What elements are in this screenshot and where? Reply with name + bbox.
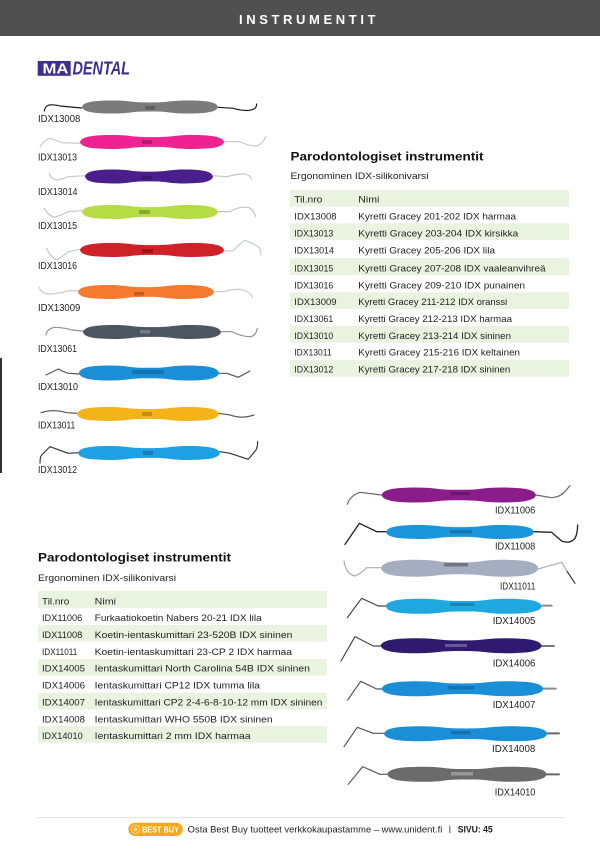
label: IDX13010: [38, 382, 79, 393]
instrument: IDX13010: [38, 365, 250, 393]
decorative edge strip: [0, 358, 2, 473]
instrument: IDX13014: [38, 169, 252, 198]
label: IDX14006: [493, 658, 536, 669]
label: IDX14005: [493, 616, 536, 627]
instrument: IDX13013: [38, 135, 266, 164]
table: Kyretti Gracey 201-202 IDX harmaa: [358, 211, 517, 221]
table: Kyretti Gracey 203-204 IDX kirsikka: [358, 228, 519, 238]
heading: Parodontologiset instrumentit: [38, 551, 231, 565]
label: IDX14008: [492, 744, 536, 755]
table: IDX13014: [294, 245, 334, 255]
table: IDX14008: [42, 714, 85, 724]
table: Ientaskumittari CP12 IDX tumma lila: [95, 681, 261, 691]
instrument: IDX14007: [348, 681, 556, 711]
instrument: IDX14008: [344, 726, 559, 755]
table: IDX13012: [294, 365, 333, 375]
panel: upper product table: [290, 150, 569, 377]
header bar: [0, 0, 600, 36]
table: IDX11006: [42, 613, 82, 623]
table: IDX13008: [294, 211, 337, 221]
instrument: IDX11006: [347, 486, 570, 516]
instrument: IDX11011: [344, 560, 575, 592]
label: IDX11011: [500, 581, 535, 592]
table: Kyretti Gracey 211-212 IDX oranssi: [358, 297, 507, 307]
instrument: IDX13016: [38, 240, 261, 272]
table: Nimi: [358, 194, 379, 204]
table: IDX13009: [294, 297, 337, 307]
label: IDX13061: [38, 344, 77, 355]
page number: SIVU: 45: [458, 825, 493, 835]
label: IDX11008: [495, 542, 536, 553]
instrument: IDX13009: [38, 285, 253, 314]
label: IDX11006: [495, 505, 536, 516]
label: IDX14007: [493, 700, 535, 711]
instrument: IDX11008: [345, 523, 578, 553]
table: Kyretti Gracey 205-206 IDX lila: [358, 245, 496, 255]
heading: Parodontologiset instrumentit: [290, 150, 484, 164]
table: Koetin-ientaskumittari 23-520B IDX sininen: [95, 630, 292, 640]
table: Til.nro: [294, 194, 322, 204]
table: IDX14006: [42, 681, 85, 691]
instrument: IDX14010: [348, 767, 559, 799]
table: Koetin-ientaskumittari 23-CP 2 IDX harmaa: [95, 647, 293, 657]
instrument: IDX13012: [38, 442, 258, 476]
table: IDX13015: [294, 263, 333, 273]
instrument: IDX13011: [38, 407, 254, 432]
best buy badge: BEST BUY: [142, 824, 179, 834]
label: IDX13012: [38, 465, 77, 476]
table: IDX14010: [42, 731, 83, 741]
table: IDX13016: [294, 280, 333, 290]
label: IDX13013: [38, 152, 77, 164]
table: Ientaskumittari WHO 550B IDX sininen: [95, 714, 273, 724]
table: Kyretti Gracey 215-216 IDX keltainen: [358, 348, 520, 358]
label: IDX13014: [38, 187, 78, 198]
instrument: IDX14006: [341, 637, 554, 669]
instrument: IDX13015: [38, 205, 256, 232]
logo: MA Dental: DENTAL: [72, 58, 130, 78]
instrument: IDX13061: [38, 325, 257, 355]
table: IDX11011: [42, 647, 77, 657]
table: Kyretti Gracey 217-218 IDX sininen: [358, 365, 510, 375]
subheading: Ergonominen IDX-silikonivarsi: [290, 171, 428, 181]
instrument: IDX14005: [347, 598, 552, 627]
table: Kyretti Gracey 213-214 IDX sininen: [358, 331, 511, 341]
table: Furkaatiokoetin Nabers 20-21 IDX lila: [95, 613, 263, 623]
label: IDX13011: [38, 421, 75, 432]
table: [290, 190, 569, 377]
label: IDX13008: [38, 114, 81, 125]
table: Kyretti Gracey 207-208 IDX vaaleanvihreä: [358, 263, 546, 273]
label: IDX13016: [38, 261, 77, 272]
table: IDX13011: [294, 348, 332, 358]
table: IDX13061: [294, 314, 333, 324]
table: Ientaskumittari North Carolina 54B IDX sininen: [95, 664, 310, 674]
table: IDX14007: [42, 698, 85, 708]
page title: INSTRUMENTIT: [239, 12, 376, 27]
footer note: Osta Best Buy tuotteet verkkokaupastamme – www.unident.fi: [188, 825, 442, 835]
best buy badge: [128, 823, 183, 836]
table: Til.nro: [42, 596, 69, 606]
label: IDX13009: [38, 303, 80, 314]
logo: MA Dental: [38, 58, 130, 78]
table: IDX13013: [294, 228, 333, 238]
label: IDX13015: [38, 221, 77, 232]
table: Ientaskumittari 2 mm IDX harmaa: [95, 731, 252, 741]
table: Kyretti Gracey 212-213 IDX harmaa: [358, 314, 513, 324]
table: Nimi: [95, 596, 116, 606]
table: Ientaskumittari CP2 2-4-6-8-10-12 mm IDX sininen: [95, 698, 322, 708]
table: [38, 591, 327, 743]
table: Kyretti Gracey 209-210 IDX punainen: [358, 280, 525, 290]
table: IDX14005: [42, 664, 85, 674]
table: IDX11008: [42, 630, 82, 640]
logo: MA Dental: MA: [42, 62, 69, 78]
panel: lower product table: [38, 551, 327, 743]
instrument: IDX13008: [38, 100, 257, 125]
subheading: Ergonominen IDX-silikonivarsi: [38, 573, 176, 583]
footer: [37, 817, 564, 836]
table: IDX13010: [294, 331, 333, 341]
label: IDX14010: [495, 788, 536, 799]
